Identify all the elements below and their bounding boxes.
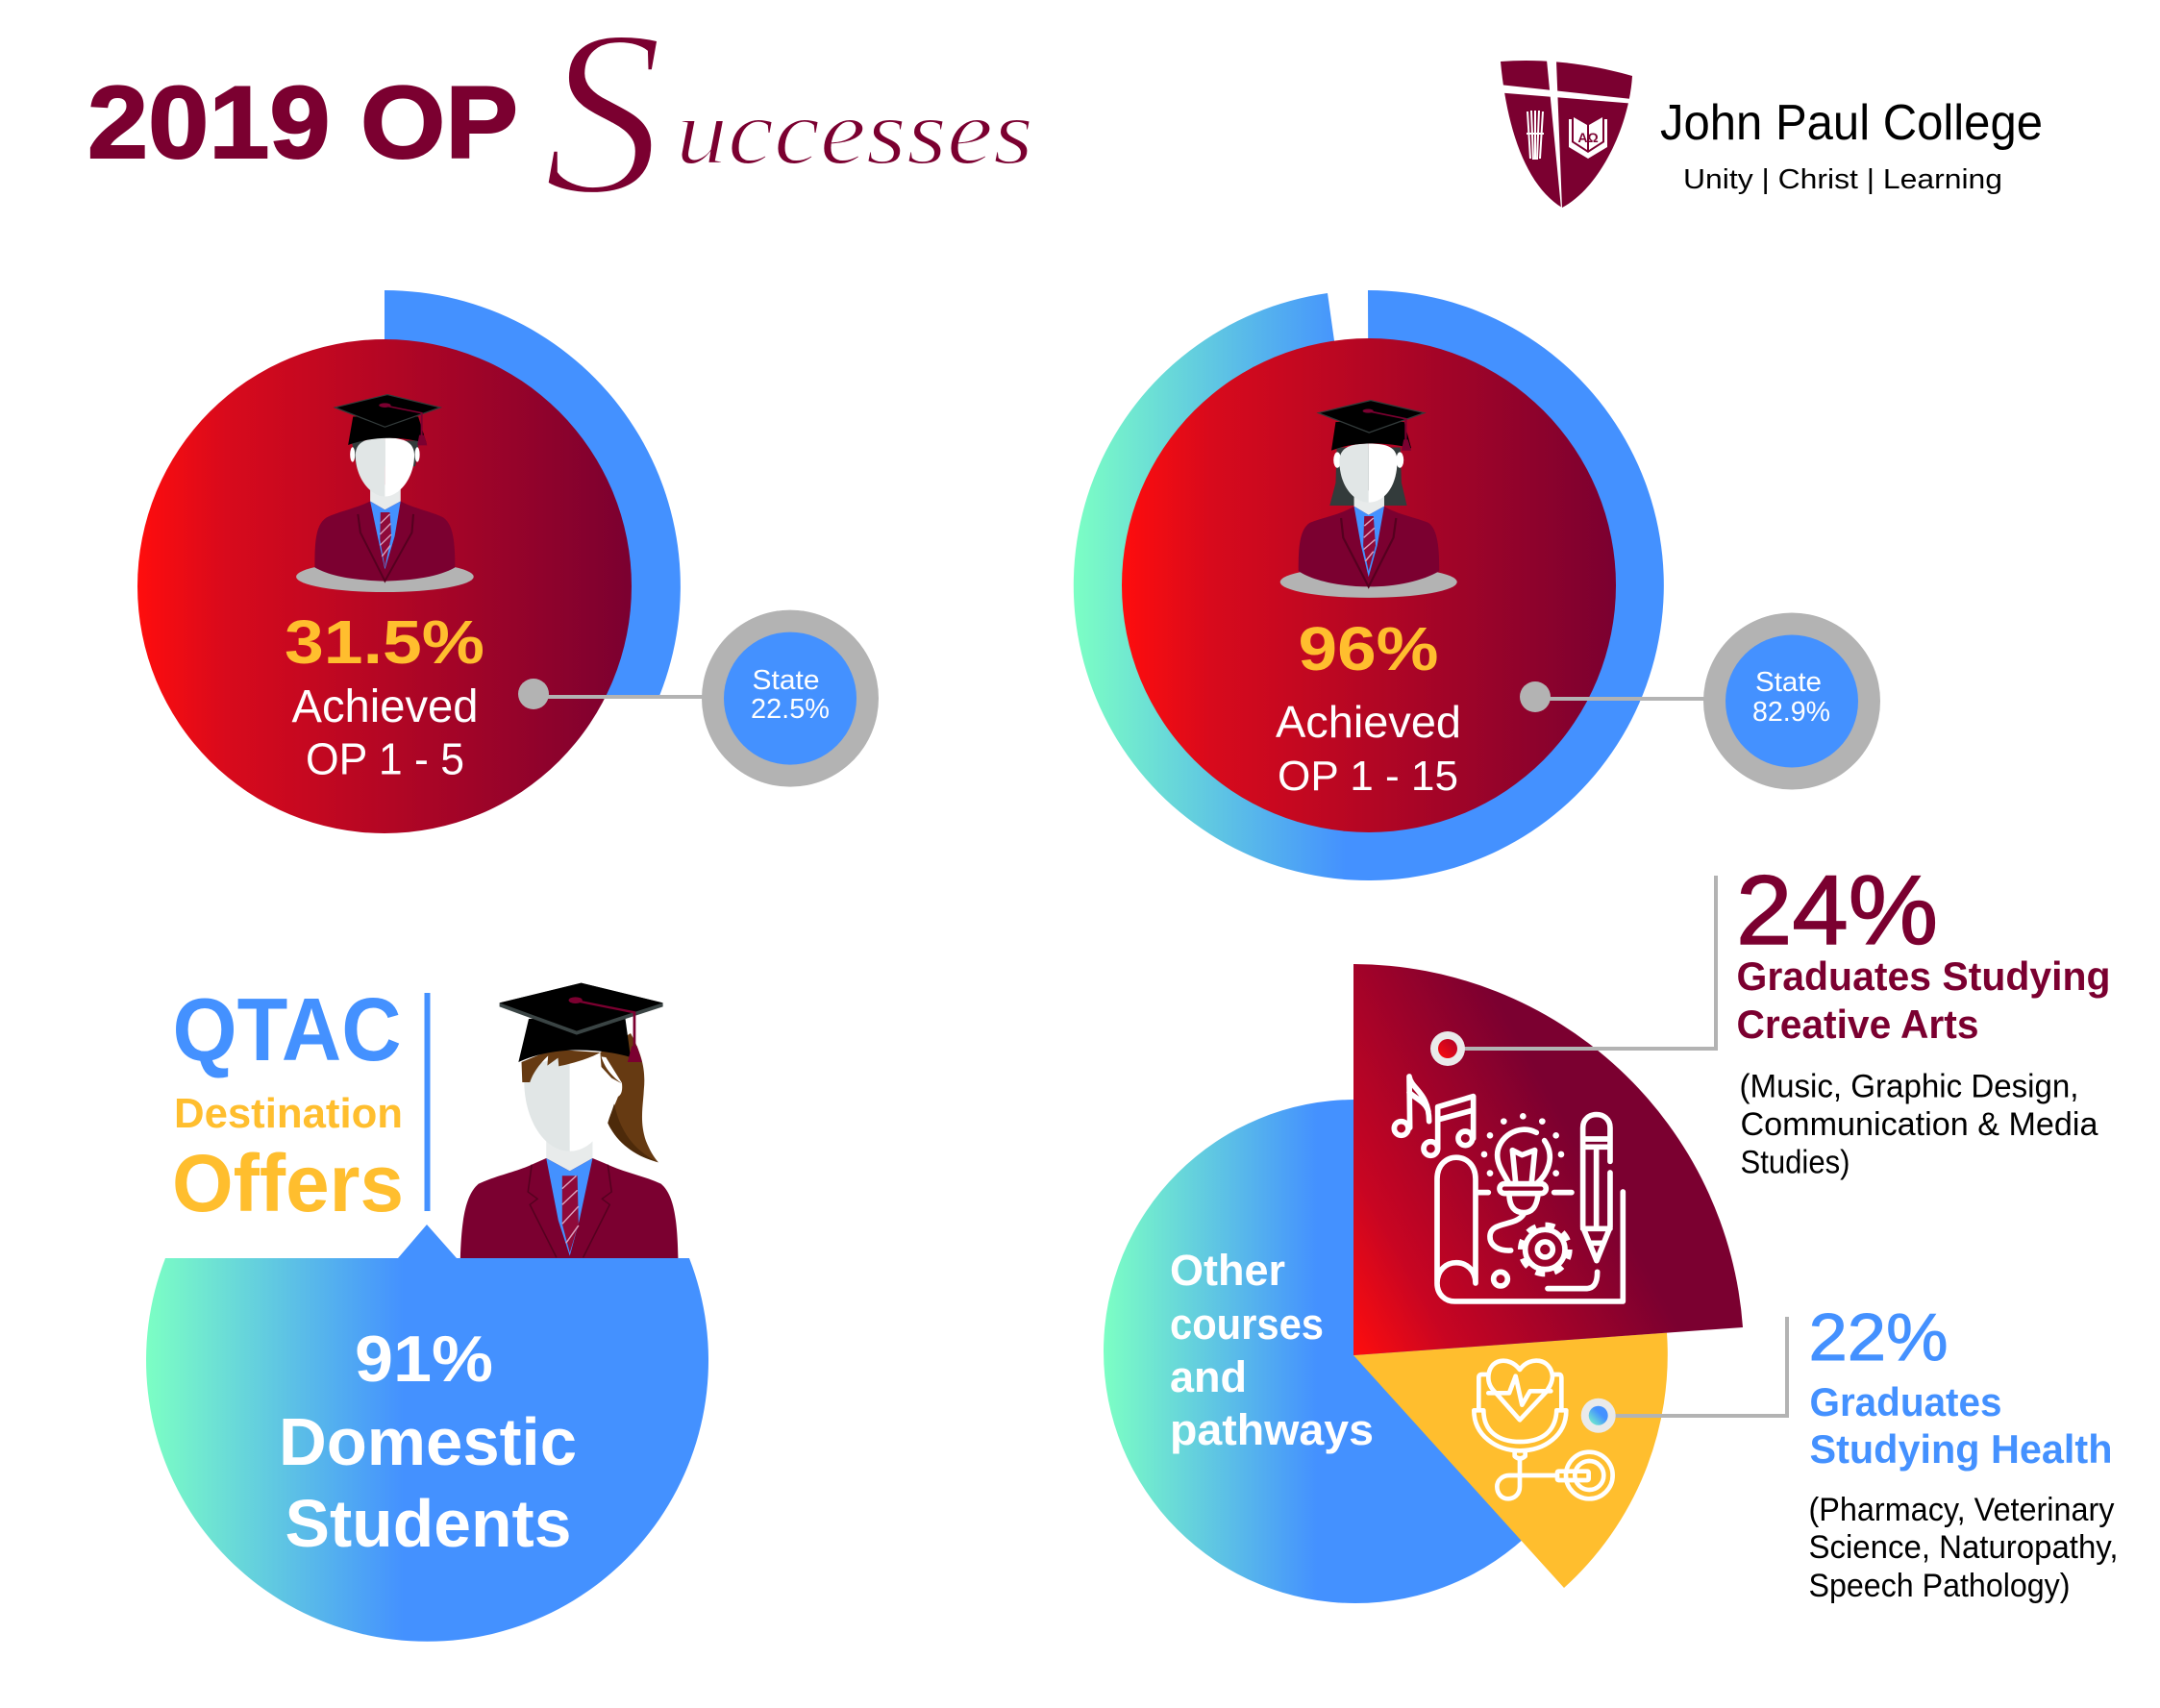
red circle — [137, 339, 632, 833]
stat: 24% creative arts: 24% — [1736, 855, 1938, 965]
logo motto: Unity | Christ | Learning — [1683, 164, 2002, 195]
stat: 22% health: Speech Pathology) — [1809, 1568, 2071, 1604]
icon: male graduate — [296, 395, 474, 592]
connector and state badge: 22.5% — [751, 694, 830, 725]
connector and state badge: 82.9% — [1752, 697, 1830, 728]
stat: 22% health: Graduates — [1809, 1379, 2001, 1424]
title: 2019 OP Successes — [87, 0, 1033, 244]
stat: 24% creative arts: Studies) — [1740, 1144, 1850, 1180]
gradient ring — [1074, 290, 1664, 880]
panel: OP 1-15 — [1074, 290, 1880, 880]
label: other courses and pathways: Other — [1170, 1246, 1285, 1295]
connector and state badge: State — [1755, 667, 1822, 698]
blue ring sector — [385, 290, 681, 696]
label: other courses and pathways: pathways — [1170, 1405, 1374, 1454]
stat 31.5%: 31.5% — [285, 607, 484, 677]
icon: female graduate large — [460, 983, 678, 1258]
stat: 24% creative arts: (Music, Graphic Design, — [1740, 1069, 2078, 1105]
panel: graduate study pie chart — [1104, 855, 2119, 1604]
logo: John Paul College — [1495, 56, 2043, 209]
connector and state badge — [1520, 613, 1880, 790]
label: other courses and pathways: courses — [1170, 1300, 1324, 1349]
stat: 22% health: Science, Naturopathy, — [1809, 1529, 2119, 1566]
stat: 24% creative arts — [1736, 855, 2111, 1180]
pie: creative arts sector — [1353, 964, 1743, 1355]
divider bar — [425, 993, 431, 1211]
stat 96%: 96% — [1298, 614, 1438, 683]
icon: creative arts — [1394, 1077, 1623, 1301]
panel: QTAC destination offers — [146, 979, 708, 1642]
heading QTAC: QTAC — [173, 979, 402, 1079]
red circle — [1122, 338, 1616, 832]
title text: 2019 OP: 2019 OP — [87, 64, 518, 180]
blue dome with pointer — [146, 1225, 708, 1642]
stat: 24% creative arts: Graduates Studying — [1736, 953, 2111, 999]
heading Offers: Offers — [172, 1138, 404, 1228]
icon: stethoscope health — [1474, 1361, 1613, 1498]
label Achieved: Achieved — [292, 681, 479, 732]
stat: 24% creative arts: Creative Arts — [1736, 1002, 1978, 1047]
heading Destination: Destination — [174, 1090, 403, 1137]
label Students: Students — [285, 1486, 571, 1561]
callout dot and leader: health — [1581, 1317, 1789, 1433]
connector and state badge: State — [752, 665, 819, 696]
label Domestic: Domestic — [279, 1404, 577, 1479]
stat 91%: 91% — [355, 1323, 493, 1396]
label: other courses and pathways: and — [1170, 1352, 1247, 1401]
script word ending: uccesses — [676, 81, 1033, 185]
label OP 1 - 5: OP 1 - 5 — [306, 734, 464, 784]
stat: 24% creative arts: Communication & Media — [1740, 1106, 2098, 1143]
label Achieved: Achieved — [1276, 697, 1461, 747]
stat: 22% health: Studying Health — [1809, 1426, 2113, 1472]
panel: OP 1-5 — [137, 290, 879, 833]
label OP 1 - 15: OP 1 - 15 — [1278, 753, 1458, 800]
pie: health sector — [1353, 1333, 1668, 1588]
callout dot and leader: creative arts — [1430, 876, 1718, 1066]
stat: 22% health: (Pharmacy, Veterinary — [1809, 1492, 2115, 1528]
logo shield — [1495, 56, 1636, 209]
logo name: John Paul College — [1660, 95, 2043, 151]
stat: 22% health — [1809, 1300, 2119, 1604]
pie: other courses — [1104, 1100, 1607, 1603]
logo shield: AΩ — [1577, 130, 1599, 145]
stat: 22% health: 22% — [1809, 1300, 1948, 1374]
label: other courses and pathways — [1170, 1246, 1374, 1454]
icon: female graduate — [1280, 401, 1457, 598]
connector and state badge — [518, 610, 879, 787]
